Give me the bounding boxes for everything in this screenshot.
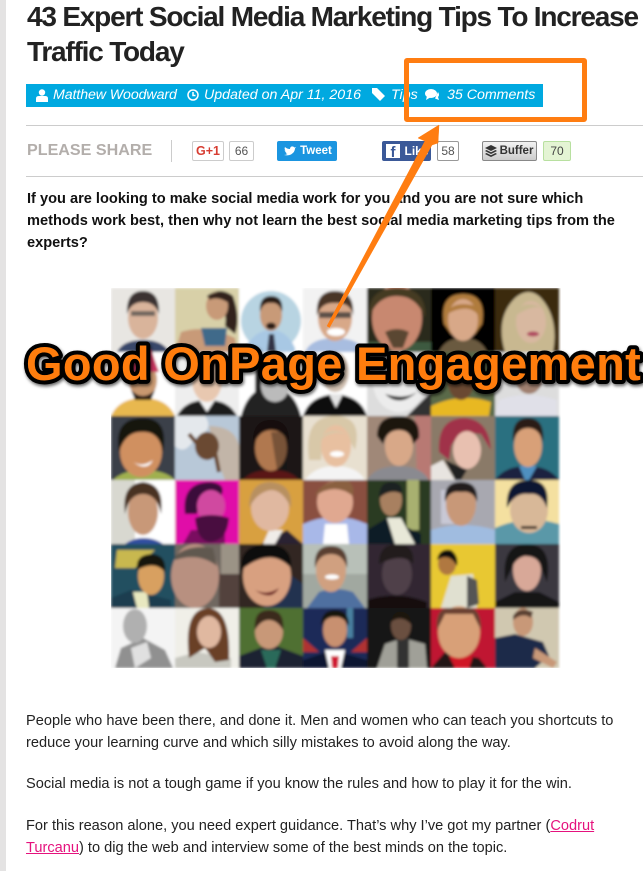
share label: PLEASE SHARE: [27, 141, 152, 159]
button: buffer: [482, 141, 537, 161]
intro paragraph: experts?: [27, 235, 88, 251]
count: facebook: 58: [441, 144, 455, 158]
row 1 photos: [111, 285, 559, 352]
paragraph: guidance: [26, 818, 594, 856]
paragraph: people: People who have been there, and done it. Men and women who can teach you shortcuts to: [26, 713, 613, 729]
icon: author: [36, 89, 48, 102]
count: google plus: [229, 141, 254, 161]
row 3 photos: [111, 416, 559, 480]
title: [27, 1, 638, 67]
engagement label: Good OnPage Engagement: [26, 337, 641, 390]
paragraph: people: reduce your learning curve and which silly mistakes to avoid along the way.: [26, 735, 511, 751]
row 2 photos: [111, 350, 559, 416]
icon: bird: [284, 146, 296, 156]
icon: facebook f: [386, 144, 400, 158]
updated date: Updated on Apr 11, 2016: [204, 87, 361, 103]
expert photo grid: [111, 288, 561, 668]
intro paragraph: [27, 191, 615, 251]
button: facebook like: [382, 141, 431, 161]
row 4 photos: [111, 480, 559, 544]
paragraph: people: [26, 713, 613, 751]
count: facebook: [437, 141, 459, 161]
button: buffer: Buffer: [500, 145, 533, 157]
icon: clock: [187, 89, 199, 101]
divider top: [26, 125, 643, 126]
meta bar: [26, 84, 543, 107]
button: google plus: G+1: [196, 144, 220, 158]
button: tweet: [277, 141, 337, 161]
divider bottom: [26, 176, 643, 177]
share divider: [171, 140, 172, 162]
intro paragraph: methods work best, then why not learn the best social media marketing tips from the: [27, 213, 615, 229]
icon: buffer stack: [485, 145, 497, 157]
tag: Tips: [391, 87, 418, 103]
button: google plus: [192, 141, 224, 161]
comments count: 35 Comments: [447, 87, 535, 103]
row 6 photos: [111, 606, 559, 668]
button: tweet: Tweet: [300, 145, 332, 157]
row 5 photos: [111, 544, 559, 608]
paragraph: social media: Social media is not a tough game if you know the rules and how to play it for the win.: [26, 776, 572, 792]
author name: Matthew Woodward: [53, 87, 177, 103]
title: Traffic Today: [27, 36, 184, 67]
highlight box: [404, 58, 587, 122]
icon: comments: [425, 89, 439, 100]
intro paragraph: If you are looking to make social media work for you and you are not sure which: [27, 191, 583, 207]
paragraph: guidance: For this reason alone, you need expert guidance. That’s why I’ve got my partner (Codrut: [26, 818, 594, 834]
count: buffer: [543, 141, 571, 161]
count: buffer: 70: [550, 144, 564, 158]
paragraph: guidance: Turcanu) to dig the web and interview some of the best minds on the topic.: [26, 840, 507, 856]
icon: tags: [372, 88, 385, 101]
button: facebook like: Like: [404, 144, 428, 158]
arrow: [326, 124, 440, 328]
left sidebar strip: [0, 0, 6, 871]
title: 43 Expert Social Media Marketing Tips To Increase: [27, 1, 638, 32]
count: google plus: 66: [235, 144, 248, 158]
